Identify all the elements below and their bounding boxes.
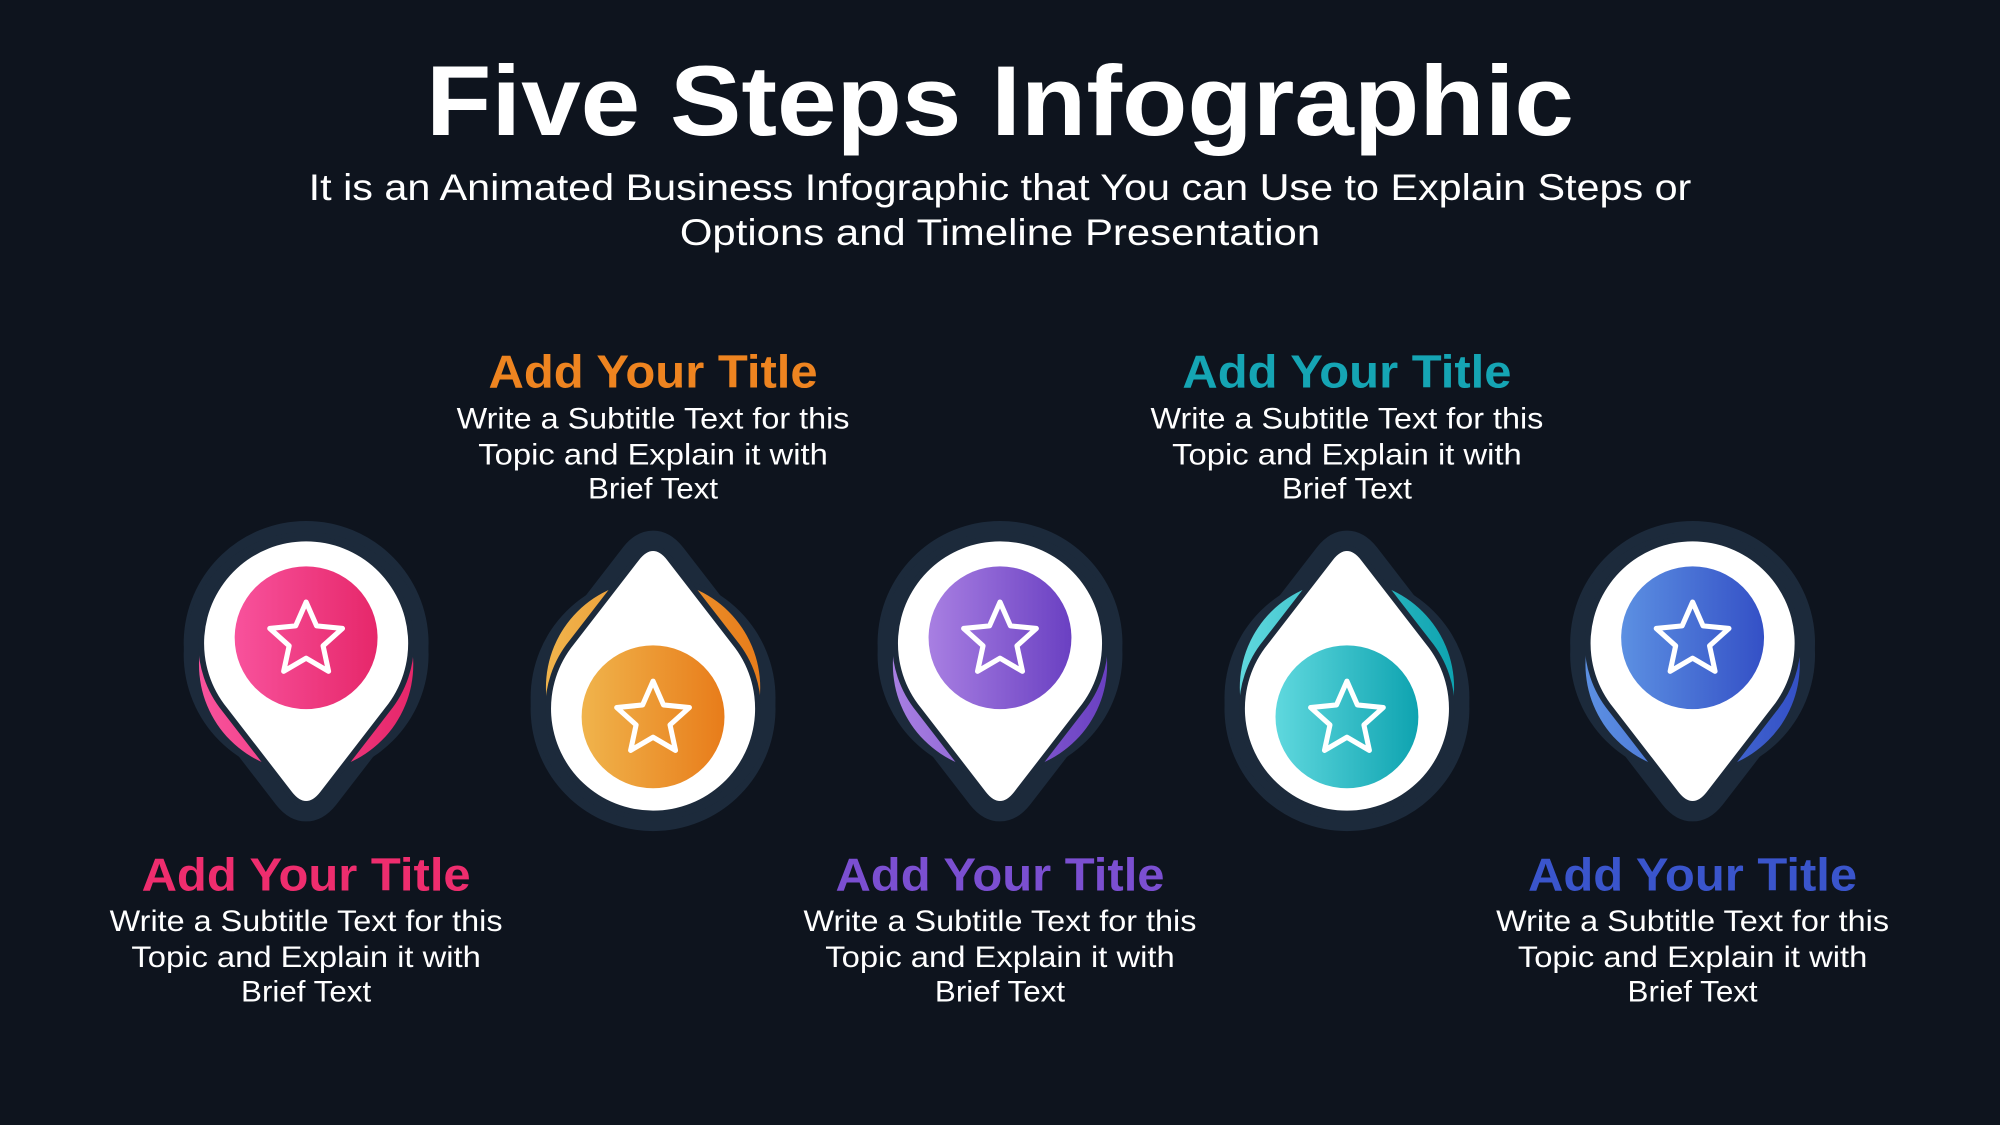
pin 5: blue (1570, 532, 1815, 801)
text block: step 2 (457, 346, 849, 506)
text block: step 1: Add Your Title (142, 848, 471, 900)
subtitle: Options and Timeline Presentation (680, 212, 1320, 253)
text block: step 4: Brief Text (1282, 473, 1412, 506)
subtitle (309, 167, 1691, 253)
text block: step 1: Write a Subtitle Text for this (110, 905, 503, 938)
text block: step 4: Topic and Explain it with (1172, 438, 1522, 471)
text block: step 2: Brief Text (588, 473, 718, 506)
pin 2: orange (531, 551, 776, 820)
text block: step 5: Add Your Title (1528, 848, 1857, 900)
text block: step 5 (1496, 848, 1889, 1008)
text block: step 1: Topic and Explain it with (131, 941, 481, 974)
pin 4: teal (1224, 551, 1469, 820)
pin 1: pink (184, 532, 429, 801)
text block: step 3: Brief Text (935, 975, 1065, 1008)
text block: step 5: Brief Text (1628, 975, 1758, 1008)
text block: step 4 (1151, 346, 1543, 506)
text block: step 2: Topic and Explain it with (478, 438, 828, 471)
pin 3: purple (878, 532, 1122, 801)
subtitle: It is an Animated Business Infographic that You can Use to Explain Steps or (309, 167, 1691, 208)
text block: step 2: Write a Subtitle Text for this (457, 403, 849, 436)
text block: step 3 (804, 848, 1196, 1008)
text block: step 2: Add Your Title (489, 346, 818, 398)
text block: step 5: Write a Subtitle Text for this (1496, 905, 1889, 938)
title: Five Steps Infographic (426, 46, 1574, 157)
text block: step 3: Write a Subtitle Text for this (804, 905, 1196, 938)
text block: step 4: Write a Subtitle Text for this (1151, 403, 1543, 436)
text block: step 1 (110, 848, 503, 1008)
text block: step 3: Topic and Explain it with (825, 941, 1175, 974)
text block: step 1: Brief Text (241, 975, 371, 1008)
text block: step 3: Add Your Title (835, 848, 1165, 900)
text block: step 4: Add Your Title (1182, 346, 1511, 398)
text block: step 5: Topic and Explain it with (1518, 941, 1867, 974)
